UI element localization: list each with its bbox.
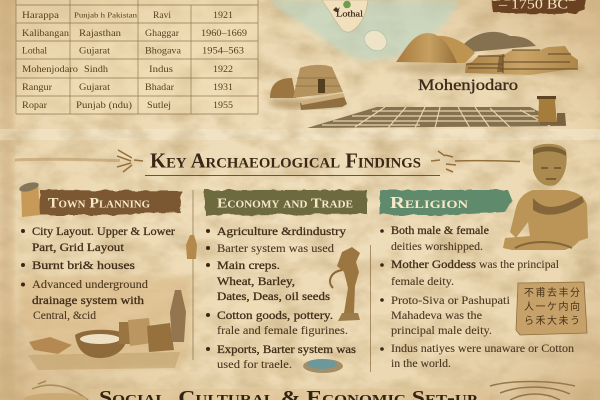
table rows [22, 10, 247, 111]
bullet list: economy and trade: Barter system was used [217, 243, 334, 255]
banner: town planning [18, 181, 182, 217]
bullet list: economy and trade: Main creps. [217, 260, 280, 272]
date badge [491, 0, 587, 14]
banner: religion [380, 190, 512, 215]
table rows: Bhogava [145, 46, 182, 56]
table rows: Gujarat [79, 83, 110, 93]
illustration: seated priest statue [503, 144, 588, 250]
bullet list: town planning: Part, Grid Layout [32, 242, 125, 254]
bullet list: economy and trade [206, 226, 357, 371]
bullet list: religion [380, 225, 574, 370]
table rows: 1921 [213, 11, 233, 21]
banner: religion: Religion [390, 193, 468, 212]
bullet list: religion: Indus natiyes were unaware or Cotton [391, 343, 574, 355]
bullet list: town planning: Burnt bri& houses [32, 260, 136, 272]
illustration: brick hut [268, 65, 348, 110]
table rows: Sindh [84, 65, 108, 75]
table rows: Ghaggar [145, 29, 180, 39]
illustration: inscribed seal: ら 禾 大 未 う [524, 312, 580, 327]
table rows: Bhadar [145, 83, 175, 93]
bullet list: town planning: Advanced underground [32, 279, 148, 291]
bullet list: economy and trade: used for traele. [217, 359, 292, 371]
heading: key archaeological findings: Key Archaeological Findings [150, 148, 421, 172]
bullet list: economy and trade: Agriculture &rdindustry [217, 226, 346, 238]
bullet list: religion: female deity. [391, 276, 454, 288]
table rows: Harappa [22, 11, 60, 21]
bullet list: religion: principal male deity. [391, 325, 492, 337]
bullet list: town planning: Central, &cid [33, 310, 96, 322]
table rows: 1954–563 [202, 46, 244, 56]
table rows: 1931 [213, 83, 233, 93]
banner: economy and trade: Economy and Trade [217, 196, 353, 212]
illustration: inscribed seal: 人 一 ケ 内 向 [524, 298, 580, 313]
table rows: Lothal [22, 46, 47, 56]
bullet list: town planning [21, 226, 175, 322]
marker: Lothal [333, 1, 364, 18]
bullet list: economy and trade: Cotton goods, pottery. [217, 310, 333, 322]
table rows: Punjab (ndu) [76, 100, 132, 111]
illustration: city grid plan [307, 107, 567, 128]
table rows: Gujarat [79, 46, 110, 56]
panel: town planning [18, 181, 192, 370]
illustration: dancing figurine [330, 247, 360, 321]
bullet list: religion: Mahadeva was the [391, 310, 482, 322]
illustration: Mohenjodaro mounds and stepped ruins [385, 32, 585, 75]
bullet list: religion: deities worshipped. [391, 241, 483, 253]
table rows: Ropar [22, 101, 48, 111]
bullet list: religion: was the principal [479, 259, 559, 271]
table rows: Ravi [153, 11, 171, 21]
divider icon: small bottle [186, 190, 197, 360]
banner: town planning: Town Planning [48, 196, 150, 212]
ornament: left bottom corner [23, 381, 88, 400]
panel: economy and trade [205, 190, 367, 373]
illustration: inscribed seal [516, 282, 587, 335]
table rows: Rangur [22, 83, 53, 93]
table rows: Rajasthan [79, 29, 121, 39]
bullet list: religion: Proto-Siva or Pashupati [391, 295, 510, 307]
illustration: food and bricks backdrop [18, 276, 192, 370]
bullet list: economy and trade: frale and female figurines. [217, 325, 348, 337]
table rows: 1955 [213, 101, 233, 111]
heading: key archaeological findings [15, 148, 520, 176]
banner: economy and trade [205, 190, 367, 215]
bullet list: religion: Mother Goddess [391, 259, 477, 271]
bullet list: town planning: City Layout. Upper & Lower [32, 226, 175, 238]
bullet list: economy and trade: Exports, Barter system was [217, 344, 357, 356]
bullet list: religion: Both male & female [391, 225, 489, 237]
ornament: right bottom corner [490, 382, 575, 400]
table rows: 1960–1669 [201, 29, 247, 39]
bullet list: economy and trade: Wheat, Barley, [217, 276, 295, 288]
bullet list: town planning: drainage system with [32, 295, 144, 307]
illustration: inscribed seal: 不 甫 去 丰 分 [524, 284, 580, 299]
table rows: Kalibangan [22, 29, 69, 39]
table rows: Indus [149, 65, 173, 75]
illustration: storage jar [537, 96, 566, 125]
bullet list: economy and trade: Dates, Deas, oil seeds [217, 291, 331, 303]
marker: Lothal: Lothal [336, 8, 364, 18]
illustration: plate of beads [303, 359, 343, 373]
table rows: Sutlej [147, 101, 171, 111]
panel: sites table [16, 0, 258, 114]
bullet list: religion: in the world. [391, 358, 451, 370]
table rows: Mohenjodaro [22, 65, 78, 75]
table rows: Punjab h Pakistan [74, 10, 137, 20]
table rows: 1922 [213, 65, 233, 75]
map of sites [268, 0, 458, 60]
panel: religion [380, 144, 588, 370]
label: Mohenjodaro: Mohenjodaro [418, 77, 518, 94]
